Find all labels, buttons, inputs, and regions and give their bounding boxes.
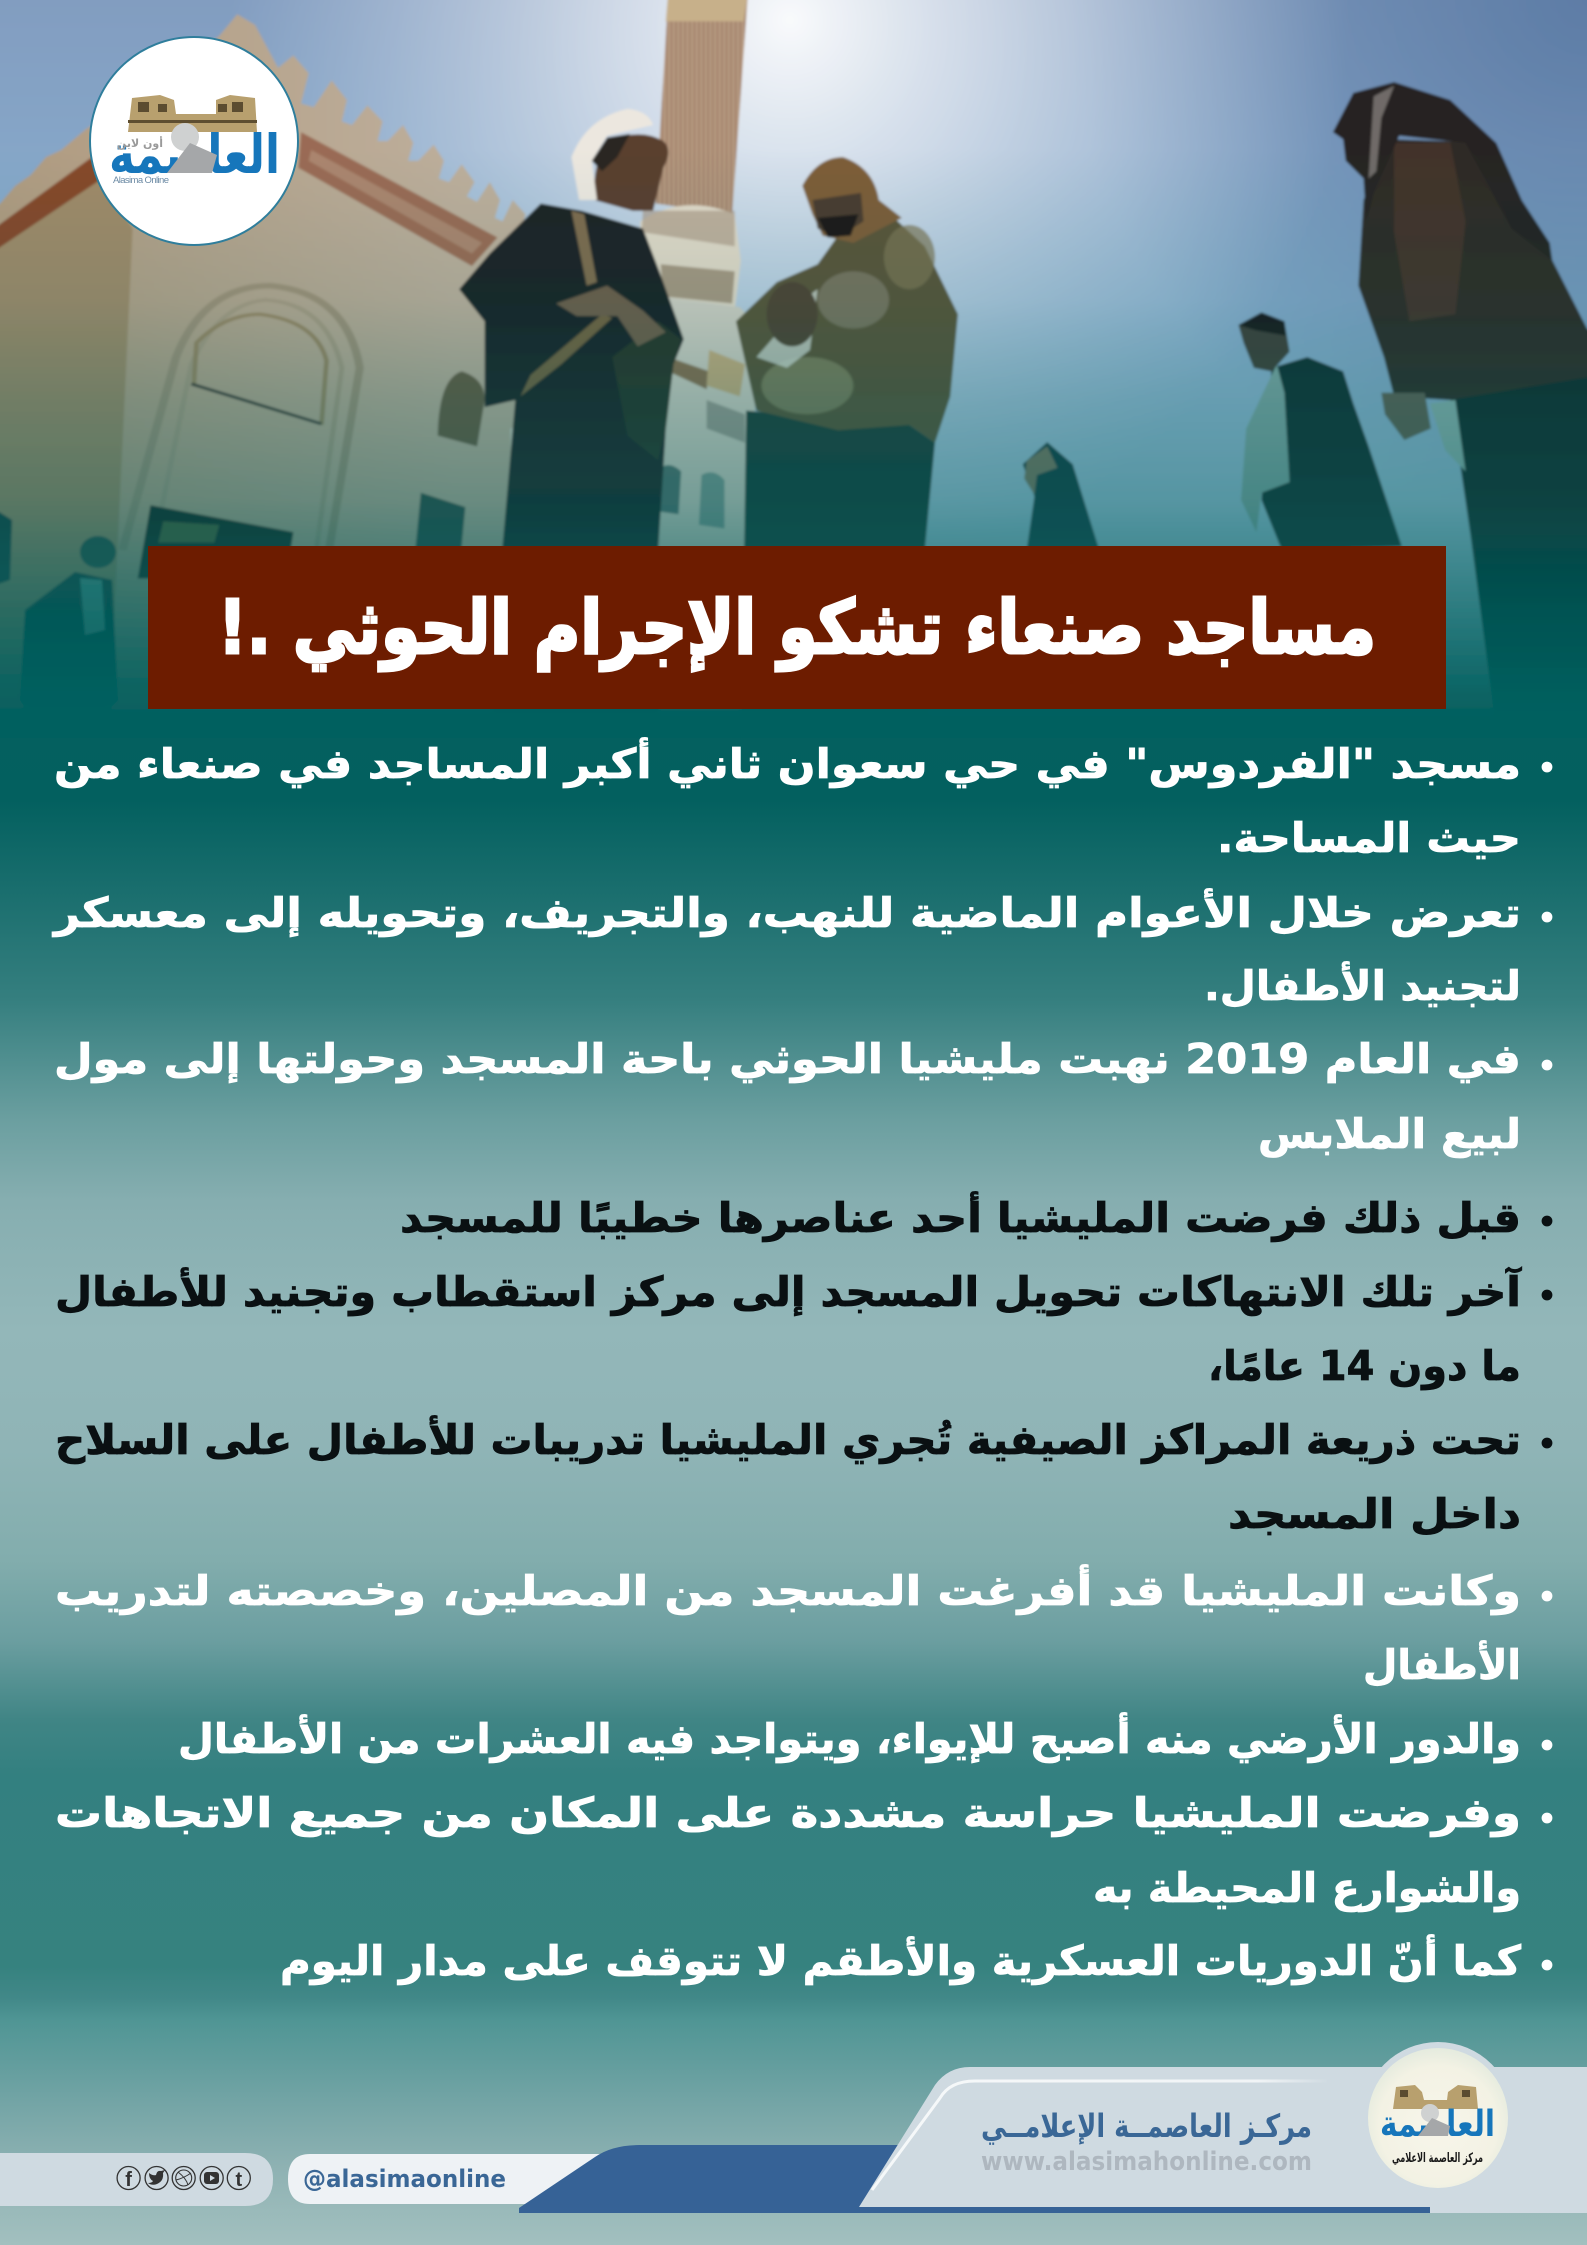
footer: blue ribbon xyxy=(519,2145,1430,2213)
teal fade over photo xyxy=(0,192,1587,738)
bullet 3: لبيع الملابس xyxy=(1258,1110,1521,1158)
icon: twitter xyxy=(145,2166,168,2190)
icon: grey globe in logo xyxy=(171,123,199,151)
icon: grey globe small xyxy=(1421,2104,1439,2122)
chevron small xyxy=(1418,2118,1450,2136)
bullet 7 xyxy=(55,1564,1552,1689)
bullet 3: في العام 2019 نهبت مليشيا الحوثي باحة المسجد وحولتها إلى مول xyxy=(54,1035,1521,1084)
icon: tumblr xyxy=(227,2166,250,2191)
bullet 2 xyxy=(52,887,1552,1010)
distant person small xyxy=(1023,442,1099,550)
title banner xyxy=(148,546,1446,709)
bullet 6 xyxy=(55,1414,1552,1538)
icon: youtube xyxy=(200,2166,223,2190)
small background figures xyxy=(0,512,120,710)
bullet 1 xyxy=(54,737,1552,862)
bullet 2: لتجنيد الأطفال. xyxy=(1204,960,1521,1010)
logo wordmark: العاصمة xyxy=(109,123,280,186)
bullet 9: وفرضت المليشيا حراسة مشددة على المكان من جميع الاتجاهات xyxy=(55,1789,1521,1838)
logo: top left round badge xyxy=(90,37,298,245)
plaque xyxy=(138,505,293,579)
bullet 7: وكانت المليشيا قد أفرغت المسجد من المصلين، وخصصته لتدريب xyxy=(55,1564,1521,1616)
bullet 7: الأطفال xyxy=(1363,1639,1521,1689)
bullet 6: داخل المسجد xyxy=(1228,1490,1521,1538)
bullet 6: تحت ذريعة المراكز الصيفية تُجري المليشيا تدريبات للأطفال على السلاح xyxy=(55,1414,1521,1464)
large hooded man on the right xyxy=(1333,82,1587,768)
person with white headcloth xyxy=(459,109,684,768)
title text: مساجد صنعاء تشكو الإجرام الحوثي .! xyxy=(218,585,1376,672)
logo small latin: Alasima Online xyxy=(113,175,169,186)
handle text: @alasimaonline xyxy=(303,2165,506,2193)
bullet 8: والدور الأرضي منه أصبح للإيواء، ويتواجد فيه العشرات من الأطفال xyxy=(178,1712,1521,1764)
website url: www.alasimahonline.com xyxy=(981,2147,1312,2177)
wordmark small: العاصمة xyxy=(1380,2104,1495,2145)
bullet 10: كما أنّ الدوريات العسكرية والأطقم لا تتوقف على مدار اليوم xyxy=(280,1934,1521,1986)
right wing xyxy=(510,298,756,711)
bullet 5: ما دون 14 عامًا، xyxy=(1208,1342,1521,1391)
icon: old city buildings xyxy=(128,95,257,132)
logo: bottom right round badge xyxy=(1362,2042,1514,2194)
icon: facebook: f xyxy=(125,2169,132,2191)
icon: dribbble xyxy=(172,2166,195,2190)
bullet 1: حيث المساحة. xyxy=(1217,814,1521,862)
logo small arabic: أون لاين xyxy=(117,136,163,150)
sky xyxy=(0,0,1587,770)
minaret xyxy=(640,0,749,311)
person in dark jacket with pale shawl xyxy=(1239,312,1402,550)
badge caption: مركز العاصمة الاعلامي xyxy=(1392,2151,1483,2166)
panel highlight line xyxy=(872,2081,1327,2190)
bullet 5 xyxy=(55,1266,1552,1391)
bullet 1: مسجد "الفردوس" في حي سعوان ثاني أكبر المساجد في صنعاء من xyxy=(54,737,1521,789)
mosque building xyxy=(0,14,756,711)
door xyxy=(414,492,466,546)
bullet 5: آخر تلك الانتهاكات تحويل المسجد إلى مركز استقطاب وتجنيد للأطفال xyxy=(55,1266,1522,1317)
bullet 2: تعرض خلال الأعوام الماضية للنهب، والتجريف، وتحويله إلى معسكر xyxy=(52,887,1521,938)
bullet 4: قبل ذلك فرضت المليشيا أحد عناصرها خطيبًا للمسجد xyxy=(400,1191,1521,1242)
bullet 3 xyxy=(54,1035,1552,1158)
footer: light title panel xyxy=(859,2067,1587,2213)
window xyxy=(438,371,485,446)
icon: tumblr: t xyxy=(235,2169,242,2191)
footer: handle pill xyxy=(288,2154,620,2204)
center name arabic: مركـز العاصمــة الإعلامــي xyxy=(981,2107,1312,2145)
icon: old city buildings small xyxy=(1393,2085,1478,2109)
icon: facebook xyxy=(117,2166,140,2191)
bullet 9 xyxy=(55,1789,1552,1913)
photo: mosque and armed men under a blue sky xyxy=(0,0,1587,770)
logo grey chevron xyxy=(167,143,217,173)
footer: social icons pill xyxy=(0,2153,273,2206)
bullet 9: والشوارع المحيطة به xyxy=(1093,1864,1521,1913)
arch xyxy=(122,286,360,550)
person in camouflage jacket xyxy=(736,157,958,768)
